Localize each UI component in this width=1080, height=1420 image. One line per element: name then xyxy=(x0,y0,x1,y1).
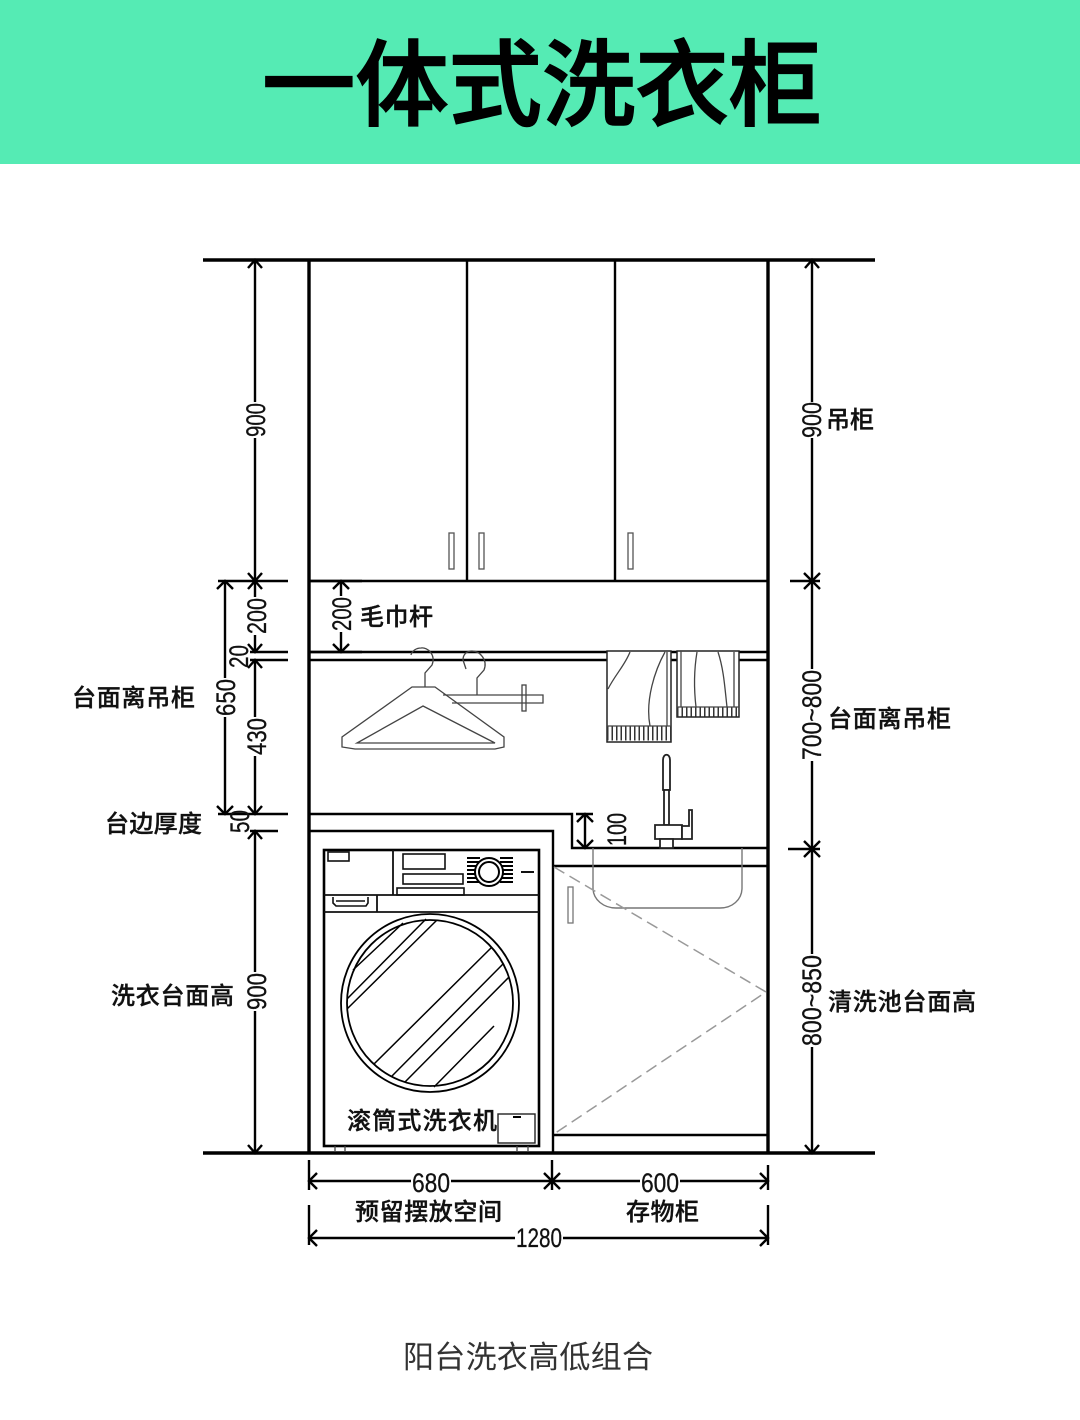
dimension chain: right height xyxy=(788,260,827,1153)
filter hatch xyxy=(498,1114,535,1143)
header band with title xyxy=(0,0,1080,164)
dimension 900 top: 900 xyxy=(241,403,271,437)
dimension: 650: 650 xyxy=(211,679,241,716)
panel: drum washing machine xyxy=(324,850,539,1152)
label: towel rail: 毛巾杆 xyxy=(360,604,433,631)
door handle xyxy=(568,887,573,923)
dimension: 650 xyxy=(211,581,241,814)
label: sink counter height: 清洗池台面高 xyxy=(828,989,976,1016)
dimension 600: 600 xyxy=(641,1168,679,1198)
counter outline over washer niche xyxy=(309,814,768,1153)
washer door glass xyxy=(341,914,519,1092)
dimension 200: 200 xyxy=(242,598,272,634)
label: laundry counter height: 洗衣台面高 xyxy=(111,983,234,1010)
dimension 50: 50 xyxy=(225,810,255,833)
structure: walls, ceiling and floor lines xyxy=(203,260,875,1153)
dimension 680: 680 xyxy=(412,1168,450,1198)
dimension: inner 200: 200 xyxy=(327,597,357,631)
label: counter edge thickness: 台边厚度 xyxy=(105,811,202,838)
label: wall cabinet: 吊柜 xyxy=(826,407,874,434)
icon: faucet xyxy=(655,755,692,848)
dimension 900 right: 900 xyxy=(797,402,827,438)
washer label: 滚筒式洗衣机 xyxy=(347,1108,497,1135)
icon: left towel xyxy=(607,651,671,742)
icon: rear clothes hanger xyxy=(443,651,543,711)
cabinet handles xyxy=(449,533,633,569)
label: counter to cabinet left: 台面离吊柜 xyxy=(72,685,195,712)
dimension: 100 xyxy=(576,813,632,848)
title: 一体式洗衣柜 xyxy=(262,33,822,138)
dimension 700~800: 700~800 xyxy=(797,670,827,760)
panel: wall cabinet xyxy=(309,260,768,581)
icon: right towel xyxy=(677,651,739,717)
washer feet xyxy=(335,1146,528,1152)
icon: sink basin xyxy=(593,848,742,908)
control panel details xyxy=(328,852,534,906)
dimension: inner 200 xyxy=(310,581,362,652)
caption: 阳台洗衣高低组合 xyxy=(403,1340,653,1375)
towel rail xyxy=(309,652,768,660)
dimension 900 bottom: 900 xyxy=(242,973,272,1010)
icon: front clothes hanger xyxy=(342,648,504,749)
dimension: 100: 100 xyxy=(602,813,632,846)
dimension 430: 430 xyxy=(242,718,272,755)
label: storage cabinet: 存物柜 xyxy=(626,1199,699,1226)
dimension chain: bottom widths xyxy=(309,1160,768,1198)
dimension 20: 20 xyxy=(224,645,254,668)
label: reserved space: 预留摆放空间 xyxy=(355,1199,502,1226)
dimension chain: left height xyxy=(218,260,288,1153)
base cabinet door xyxy=(553,867,768,1135)
dimension 800~850: 800~850 xyxy=(797,955,827,1046)
label: counter to cabinet right: 台面离吊柜 xyxy=(828,706,951,733)
dimension: total width 1280: 1280 xyxy=(516,1223,562,1253)
dimension: total width 1280 xyxy=(309,1205,768,1253)
